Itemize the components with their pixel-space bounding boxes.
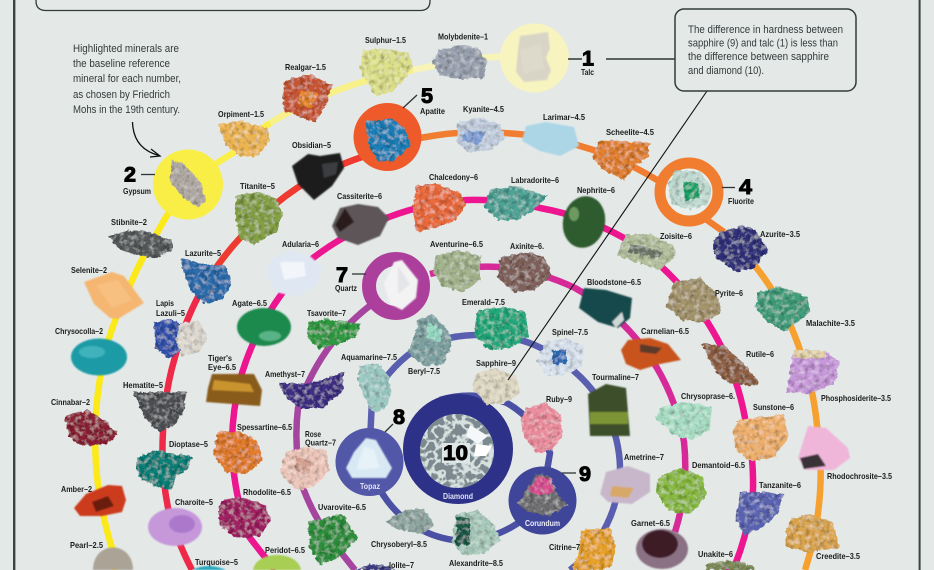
callout box: The difference in hardness between <box>688 24 843 36</box>
tick: 9 <box>562 472 576 474</box>
mineral: Chrysocolla <box>71 338 127 376</box>
label: Hematite: Hematite–5 <box>123 380 163 390</box>
mineral: Chrysoprase <box>655 402 712 440</box>
label: Selenite: Selenite–2 <box>71 265 107 275</box>
node circle: Talc <box>500 24 569 92</box>
numeral 5: 5 <box>421 85 433 108</box>
mineral: Topaz <box>346 438 392 478</box>
mineral: Cassiterite <box>332 204 389 245</box>
mineral: Carnelian <box>621 338 681 370</box>
mineral: Selenite <box>84 272 144 319</box>
mineral: Lapis Lazuli <box>154 319 208 358</box>
mineral: Cinnabar <box>64 410 118 446</box>
label: Labradorite: Labradorite–6 <box>511 175 559 185</box>
mineral: Quartz <box>384 260 418 310</box>
mineral: Adularia <box>266 251 323 297</box>
label: Titanite: Titanite–5 <box>240 181 275 191</box>
track: indigo outer <box>369 335 620 570</box>
line: talc to callout <box>606 58 675 60</box>
mineral: Zoisite <box>617 234 676 270</box>
callout box: and diamond (10). <box>688 65 764 77</box>
label: Tiger's Eye: Tiger's <box>208 353 232 363</box>
mineral: Larimar <box>522 122 579 156</box>
label: Garnet: Garnet–6.5 <box>631 518 670 528</box>
label: Tourmaline: Tourmaline–7 <box>592 372 639 382</box>
mineral: Garnet <box>636 529 688 569</box>
hardness numerals <box>124 48 752 486</box>
mineral: Unakite <box>706 560 754 570</box>
track: amber <box>724 232 821 570</box>
label: Azurite: Azurite–3.5 <box>760 229 800 239</box>
mineral: Peridot <box>253 555 301 570</box>
label: Malachite: Malachite–3.5 <box>806 318 855 328</box>
mineral: Corundum <box>518 474 568 516</box>
label: Amethyst: Amethyst–7 <box>265 369 305 379</box>
mineral: Sunstone <box>733 414 788 462</box>
node circle: Gypsum <box>153 150 223 220</box>
mineral: Agate <box>237 308 291 346</box>
label: Realgar: Realgar–1.5 <box>285 62 326 72</box>
label: Spinel: Spinel–7.5 <box>552 327 588 337</box>
mineral: Hematite <box>133 392 186 432</box>
node circle: Quartz <box>369 259 423 313</box>
label: Scheelite: Scheelite–4.5 <box>606 127 654 137</box>
numeral 4: 4 <box>739 176 752 199</box>
mineral: Iolite <box>356 564 396 570</box>
label: Quartz: Quartz <box>335 283 357 293</box>
label: Chrysoberyl: Chrysoberyl–8.5 <box>371 539 427 549</box>
callout box <box>675 9 856 91</box>
mineral: Labradorite <box>484 186 548 220</box>
label: Tanzanite: Tanzanite–6 <box>759 480 801 490</box>
track: orange <box>420 132 724 232</box>
mineral: Aquamarine <box>358 363 392 412</box>
label: Rhodolite: Rhodolite–6.5 <box>243 487 291 497</box>
track: red <box>200 157 362 293</box>
track: pale yellow <box>413 57 535 70</box>
numeral 8: 8 <box>393 406 405 429</box>
label: Rose Quartz: Rose <box>305 429 321 439</box>
label: Peridot: Peridot–6.5 <box>265 545 305 555</box>
mineral: Stibnite <box>108 230 172 258</box>
mineral: Rutile <box>702 343 758 386</box>
mineral: Phosphosiderite <box>786 350 840 394</box>
label: Phosphosiderite: Phosphosiderite–3.5 <box>821 393 891 403</box>
mineral: Ametrine <box>600 466 650 504</box>
note: highlighted minerals: the baseline reference <box>73 58 170 70</box>
label: Lapis Lazuli: Lazuli–5 <box>156 308 185 318</box>
label: Creedite: Creedite–3.5 <box>816 551 860 561</box>
mineral: Pyrite <box>666 278 722 322</box>
mineral: Realgar <box>283 74 332 122</box>
label: Chrysoprase: Chrysoprase–6. <box>681 391 735 401</box>
track: crimson <box>162 293 200 570</box>
mineral: Pearl <box>93 548 133 570</box>
node circle: Topaz <box>336 428 404 496</box>
mineral: Citrine <box>572 528 616 570</box>
track: pink purple <box>430 267 685 532</box>
mineral: Kyanite <box>456 118 505 152</box>
mineral: Apatite <box>366 118 411 161</box>
track: purple <box>296 286 396 570</box>
label: Molybdenite: Molybdenite–1 <box>438 32 488 42</box>
mineral: Spessartine <box>213 431 263 474</box>
label: Obsidian: Obsidian–5 <box>292 140 331 150</box>
mineral: Amethyst <box>278 372 344 408</box>
mineral: Lazurite <box>181 258 232 304</box>
label: Cassiterite: Cassiterite–6 <box>337 191 382 201</box>
mineral: Fluorite <box>668 170 712 210</box>
label: Sapphire: Sapphire–9 <box>476 358 516 368</box>
label: Agate: Agate–6.5 <box>232 298 267 308</box>
note: highlighted minerals <box>73 43 181 116</box>
mineral: Talc <box>516 32 551 82</box>
label: Aquamarine: Aquamarine–7.5 <box>341 352 397 362</box>
tick: 5 <box>403 95 417 108</box>
mineral: Emerald <box>474 307 528 350</box>
label: Kyanite: Kyanite–4.5 <box>463 104 504 114</box>
label: Pearl: Pearl–2.5 <box>70 540 103 550</box>
mineral: Amber <box>74 485 126 516</box>
label: Apatite: Apatite <box>420 106 445 116</box>
label: Uvarovite: Uvarovite–6.5 <box>318 502 366 512</box>
mineral: Rhodolite <box>218 497 271 538</box>
track: strong yellow <box>95 184 188 570</box>
top text box edge <box>36 0 430 10</box>
mineral: Axinite <box>498 252 552 292</box>
label: Ruby: Ruby–9 <box>546 394 572 404</box>
label: Cinnabar: Cinnabar–2 <box>51 397 90 407</box>
mineral: Sulphur <box>360 49 413 96</box>
label: Iolite: Iolite–7 <box>389 560 414 570</box>
mineral: Bloodstone <box>579 288 632 328</box>
tick: 1 <box>568 58 582 60</box>
mineral: Tiger's Eye <box>206 374 262 406</box>
label: Lapis Lazuli <box>156 298 185 318</box>
mineral: Rose Quartz <box>280 447 330 490</box>
label: Diamond: Diamond <box>443 491 473 501</box>
label: Rhodochrosite: Rhodochrosite–3.5 <box>827 471 892 481</box>
label: Turquoise: Turquoise–5 <box>195 557 238 567</box>
mineral: Orpiment <box>218 121 270 156</box>
label: Corundum: Corundum <box>525 518 560 528</box>
numeral 9: 9 <box>579 463 591 486</box>
minerals <box>64 32 850 570</box>
label: Citrine: Citrine–7 <box>549 542 580 552</box>
label: Chrysocolla: Chrysocolla–2 <box>55 326 103 336</box>
node circle: Fluorite <box>660 163 718 221</box>
label: Emerald: Emerald–7.5 <box>462 297 505 307</box>
mineral: Uvarovite <box>308 514 358 565</box>
mineral: Ruby <box>521 403 562 452</box>
label: Gypsum: Gypsum <box>123 186 151 196</box>
label: Unakite: Unakite–6 <box>698 549 733 559</box>
mineral: Malachite <box>755 287 811 332</box>
numeral 10: 10 <box>443 442 468 465</box>
label: Aventurine: Aventurine–6.5 <box>430 239 483 249</box>
tick: 8 <box>385 424 393 432</box>
label: Larimar: Larimar–4.5 <box>543 112 585 122</box>
mineral: Chalcedony <box>413 183 466 232</box>
mineral: Alexandrite <box>452 510 500 555</box>
diamond disc <box>420 414 494 488</box>
note: highlighted minerals: mineral for each number, <box>73 73 181 85</box>
track: yellow <box>188 123 270 184</box>
mineral: Azurite <box>712 226 768 272</box>
label: Tiger's Eye <box>208 353 236 372</box>
mineral: Demantoid <box>656 468 707 514</box>
label: Alexandrite: Alexandrite–8.5 <box>449 558 503 568</box>
mineral: Sapphire <box>472 368 520 404</box>
tick: 2 <box>141 174 155 176</box>
label: Carnelian: Carnelian–6.5 <box>641 326 689 336</box>
connector lines <box>141 59 735 473</box>
mineral: Dioptase <box>136 450 192 490</box>
label: Tiger's Eye: Eye–6.5 <box>208 362 236 372</box>
label: Topaz: Topaz <box>360 481 380 491</box>
mineral: Gypsum <box>170 160 206 208</box>
mineral: Aventurine <box>433 250 480 292</box>
callout box: the difference between sapphire <box>688 51 829 63</box>
label: Chalcedony: Chalcedony–6 <box>429 172 478 182</box>
mineral: Chrysoberyl <box>386 509 434 534</box>
label: Demantoid: Demantoid–6.5 <box>692 460 745 470</box>
label: Ametrine: Ametrine–7 <box>624 452 664 462</box>
label: Sulphur: Sulphur–1.5 <box>365 35 406 45</box>
mineral: Creedite <box>786 514 840 552</box>
label: Pyrite: Pyrite–6 <box>715 288 743 298</box>
track: indigo inner <box>369 396 550 540</box>
track: mid yellow <box>270 70 413 123</box>
label: Rose Quartz <box>305 429 336 448</box>
mineral: Titanite <box>235 192 283 245</box>
note: highlighted minerals: Mohs in the 19th century. <box>73 104 180 116</box>
note: highlighted minerals: Highlighted minerals are <box>73 43 179 55</box>
label: Sunstone: Sunstone–6 <box>753 402 794 412</box>
label: Adularia: Adularia–6 <box>282 239 319 249</box>
numeral 7: 7 <box>336 264 348 287</box>
label: Orpiment: Orpiment–1.5 <box>218 109 264 119</box>
label: Amber: Amber–2 <box>61 484 92 494</box>
label: Rutile: Rutile–6 <box>746 349 774 359</box>
mineral: Turquoise <box>192 566 226 570</box>
label: Talc: Talc <box>581 67 594 77</box>
mineral: Tourmaline <box>588 384 630 436</box>
label: Beryl: Beryl–7.5 <box>408 366 440 376</box>
mineral: Rhodochrosite <box>798 426 850 470</box>
numeral 2: 2 <box>124 164 136 186</box>
track: magenta <box>232 200 753 570</box>
numeral 1: 1 <box>582 48 594 70</box>
note: highlighted minerals: as chosen by Friedrich <box>73 89 170 101</box>
label: Nephrite: Nephrite–6 <box>577 185 615 195</box>
mineral: Obsidian <box>292 153 344 200</box>
label: Fluorite: Fluorite <box>728 196 754 206</box>
mineral: Scheelite <box>592 140 650 180</box>
label: Dioptase: Dioptase–5 <box>169 439 208 449</box>
mineral: Molybdenite <box>433 45 487 79</box>
tick: 4 <box>722 186 735 188</box>
mineral: Charoite <box>148 508 202 546</box>
callout box: sapphire (9) and talc (1) is less than <box>688 38 838 50</box>
mineral: Nephrite <box>558 192 610 252</box>
label: Bloodstone: Bloodstone–6.5 <box>587 277 641 287</box>
node circle: Apatite <box>354 103 422 171</box>
node circle: Corundum <box>508 466 576 534</box>
line: callout to sapphire <box>508 91 707 380</box>
label: Zoisite: Zoisite–6 <box>660 231 692 241</box>
label: Tsavorite: Tsavorite–7 <box>307 308 346 318</box>
label: Rose Quartz: Quartz–7 <box>305 438 336 448</box>
spiral tracks <box>95 57 821 570</box>
label: Axinite: Axinite–6. <box>510 241 544 251</box>
label: Charoite: Charoite–5 <box>175 497 213 507</box>
label: Stibnite: Stibnite–2 <box>111 217 147 227</box>
mineral: Tanzanite <box>736 492 784 536</box>
mineral: Spinel <box>537 338 584 376</box>
label: Lapis Lazuli: Lapis <box>156 298 174 308</box>
node circle: Diamond ring <box>403 394 513 504</box>
mineral: Tsavorite <box>308 319 360 350</box>
arrow: note to gypsum <box>132 122 160 157</box>
label: Spessartine: Spessartine–6.5 <box>237 422 292 432</box>
label: Lazurite: Lazurite–5 <box>185 248 221 258</box>
tick: 7 <box>352 273 366 275</box>
mineral: Beryl <box>408 314 452 366</box>
